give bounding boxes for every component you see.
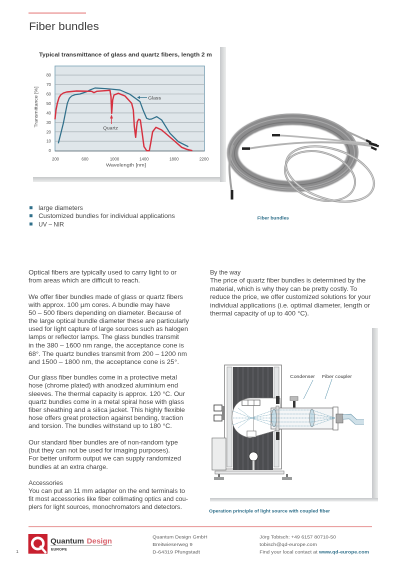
footer: address	[152, 535, 208, 554]
y axis labels: 30	[46, 120, 52, 125]
text block: construction: quartz bundles come in a metal spiral hose with glass	[28, 400, 184, 406]
callout: quartz	[103, 114, 118, 130]
text block: introduction: We offer fiber bundles made of glass or quartz fibers	[28, 295, 183, 301]
y axis labels: 50	[46, 101, 52, 106]
x axis labels: 1400	[139, 156, 149, 162]
caption: operation principle: Operation principle of light source with coupled fiber	[209, 508, 330, 514]
callout: glass: Glass	[148, 95, 161, 100]
text block: introduction: with approx. 100 µm cores. A bundle may have	[27, 303, 171, 309]
logo: Quantum Design Europe: Design	[87, 538, 112, 545]
bullet item: UV-NIR: UV – NIR	[38, 222, 65, 228]
y axis labels: 40	[46, 110, 52, 115]
x axis title: Wavelength [nm]	[106, 162, 146, 168]
text block: standard bundles: bundles at an extra charge.	[28, 465, 108, 471]
text block: construction: sleeves. The thermal capacity is approx. 120 °C. Our	[28, 392, 185, 398]
lamp housing dark body	[233, 367, 273, 470]
condenser tube	[271, 408, 333, 429]
text block: introduction	[27, 270, 189, 366]
text block: introduction: 50 – 500 fibers depending on diameter. Because of	[28, 311, 181, 317]
x axis labels: 600	[82, 156, 89, 162]
x axis labels: 1000	[110, 156, 120, 162]
text block: introduction: and 1500 – 1800 nm, the acceptance cone is 25°.	[28, 360, 179, 366]
logo: Quantum Design Europe: Quantum	[50, 538, 84, 545]
text block: introduction: 68°. The quartz bundles transmit from 200 – 1200 nm	[28, 352, 187, 358]
panel: top figure shadow	[33, 47, 226, 182]
text block: accessories: fit most accessories like fiber collimating optics and cou-	[28, 497, 188, 503]
text block: introduction: lamps or reflector lamps. The glass bundles transmit	[28, 335, 179, 341]
text block: by the way: By the way	[210, 270, 241, 276]
footer: contact: www.qd-europe.com	[318, 549, 369, 554]
clamps	[276, 396, 280, 404]
y axis labels	[46, 73, 52, 153]
footer rule	[28, 525, 372, 528]
porthole	[249, 452, 258, 461]
light rays	[233, 408, 335, 428]
label: fiber coupler: Fiber coupler	[322, 374, 353, 379]
text block: introduction: used for light capture of large sources such as halogen	[28, 327, 188, 333]
footer: contact: tobisch@qd-europe.com	[260, 542, 317, 547]
page number: 1	[16, 549, 19, 554]
label: condenser	[290, 374, 316, 399]
footer: contact: Jörg Tobisch: +49 6157 80710-50	[260, 535, 336, 540]
text block: by the way: reduce the price, we offer customized solutions for your	[210, 295, 371, 301]
text block: by the way: thermal capacity of up to 400 °C).	[210, 311, 309, 317]
label: fiber coupler	[322, 374, 353, 399]
lenses	[272, 409, 276, 427]
footer: address: Quantum Design GmbH	[152, 535, 208, 540]
text block: standard bundles	[28, 440, 181, 471]
x axis labels: 200	[52, 156, 60, 162]
text block: construction: hose offers great protection against bending, traction	[28, 416, 183, 422]
lamp detail	[242, 400, 260, 406]
footer: contact: Find your local contact at	[260, 549, 318, 554]
y axis title: Transmittance [%]	[34, 86, 38, 128]
caption: fiber bundles: Fiber bundles	[257, 216, 289, 220]
x axis labels: 2200	[199, 156, 209, 162]
text block: construction: Our glass fiber bundles come in a protective metal	[28, 375, 177, 381]
y axis labels: 10	[46, 139, 52, 144]
header: red rule and title	[28, 13, 100, 33]
text block: by the way	[210, 270, 371, 317]
photo: coiled fiber bundles	[228, 114, 381, 212]
text block: standard bundles: (but they can not be used for imaging purposes).	[28, 448, 170, 454]
y axis labels: 0	[49, 148, 52, 153]
footer: address: Breitwieserweg 9	[152, 542, 193, 547]
bullet item: large diameters: large diameters	[38, 206, 83, 212]
y axis labels: 70	[46, 82, 52, 87]
label: condenser: Condenser	[290, 374, 316, 379]
fiber	[343, 416, 364, 422]
y axis labels: 20	[46, 129, 52, 134]
text block: by the way: The price of quartz fiber bundles is determined by the	[210, 278, 366, 284]
text block: introduction: from areas which are difficult to reach.	[28, 278, 140, 284]
diagram: light source with coupled fiber	[212, 365, 364, 480]
text block: construction: fiber sheathing and a silica jacket. This highly flexible	[28, 408, 186, 414]
logo: Quantum Design Europe: EUROPE	[51, 548, 68, 552]
text block: accessories: plers for light sources, monochromators and detectors.	[28, 505, 182, 511]
footer: contact	[260, 535, 369, 554]
chart title: Typical transmittance of glass and quartz fibers, length 2 m	[39, 52, 212, 58]
bullet item: customized bundles: Customized bundles for individual applications	[38, 214, 175, 220]
line chart: transmittance	[34, 66, 209, 168]
text block: by the way: material, which is why they can be pretty costly. To	[210, 287, 358, 293]
housing frame	[224, 365, 282, 469]
text block: accessories: Accessories	[28, 481, 63, 487]
text block: by the way: individual applications (i.e. optimal diameter, length or	[210, 303, 370, 309]
text block: accessories	[28, 481, 188, 511]
white cutout	[232, 398, 281, 438]
fiber coupler end	[336, 414, 343, 423]
callout: glass	[137, 95, 161, 100]
base and feet	[215, 471, 284, 474]
text block: construction: and torsion. The bundles withstand up to 180 °C.	[28, 424, 172, 430]
text block: standard bundles: For better uniform output we can supply randomized	[28, 456, 181, 462]
text block: construction: hose (chrome plated) with anodized aluminium end	[28, 383, 178, 389]
x axis labels: 1800	[169, 156, 179, 162]
curve: glass	[58, 88, 188, 147]
text block: introduction: Optical fibers are typically used to carry light to or	[28, 270, 177, 276]
y axis labels: 60	[46, 92, 52, 96]
footer: address: D-64319 Pfungstadt	[152, 549, 201, 554]
side connectors	[214, 405, 222, 411]
text block: introduction: the large optical bundle diameter these are particularly	[28, 319, 189, 325]
x axis labels	[52, 156, 209, 162]
y axis labels: 80	[46, 73, 52, 78]
text block: standard bundles: Our standard fiber bundles are of non-random type	[28, 440, 179, 446]
callout: quartz: Quartz	[103, 125, 118, 130]
panel: diagram shadow	[210, 328, 378, 502]
text block: accessories: You can put an 11 mm adapter on the end terminals to	[28, 489, 186, 495]
text block: construction	[28, 375, 186, 430]
condenser top knob	[290, 396, 298, 400]
logo: Quantum Design Europe	[28, 534, 112, 554]
text block: introduction: in the 380 – 1600 nm range, the acceptance cone is	[28, 343, 184, 349]
title: Fiber bundles	[29, 21, 100, 33]
power box	[212, 438, 226, 470]
feature list	[30, 206, 175, 228]
curve: quartz	[55, 90, 192, 151]
